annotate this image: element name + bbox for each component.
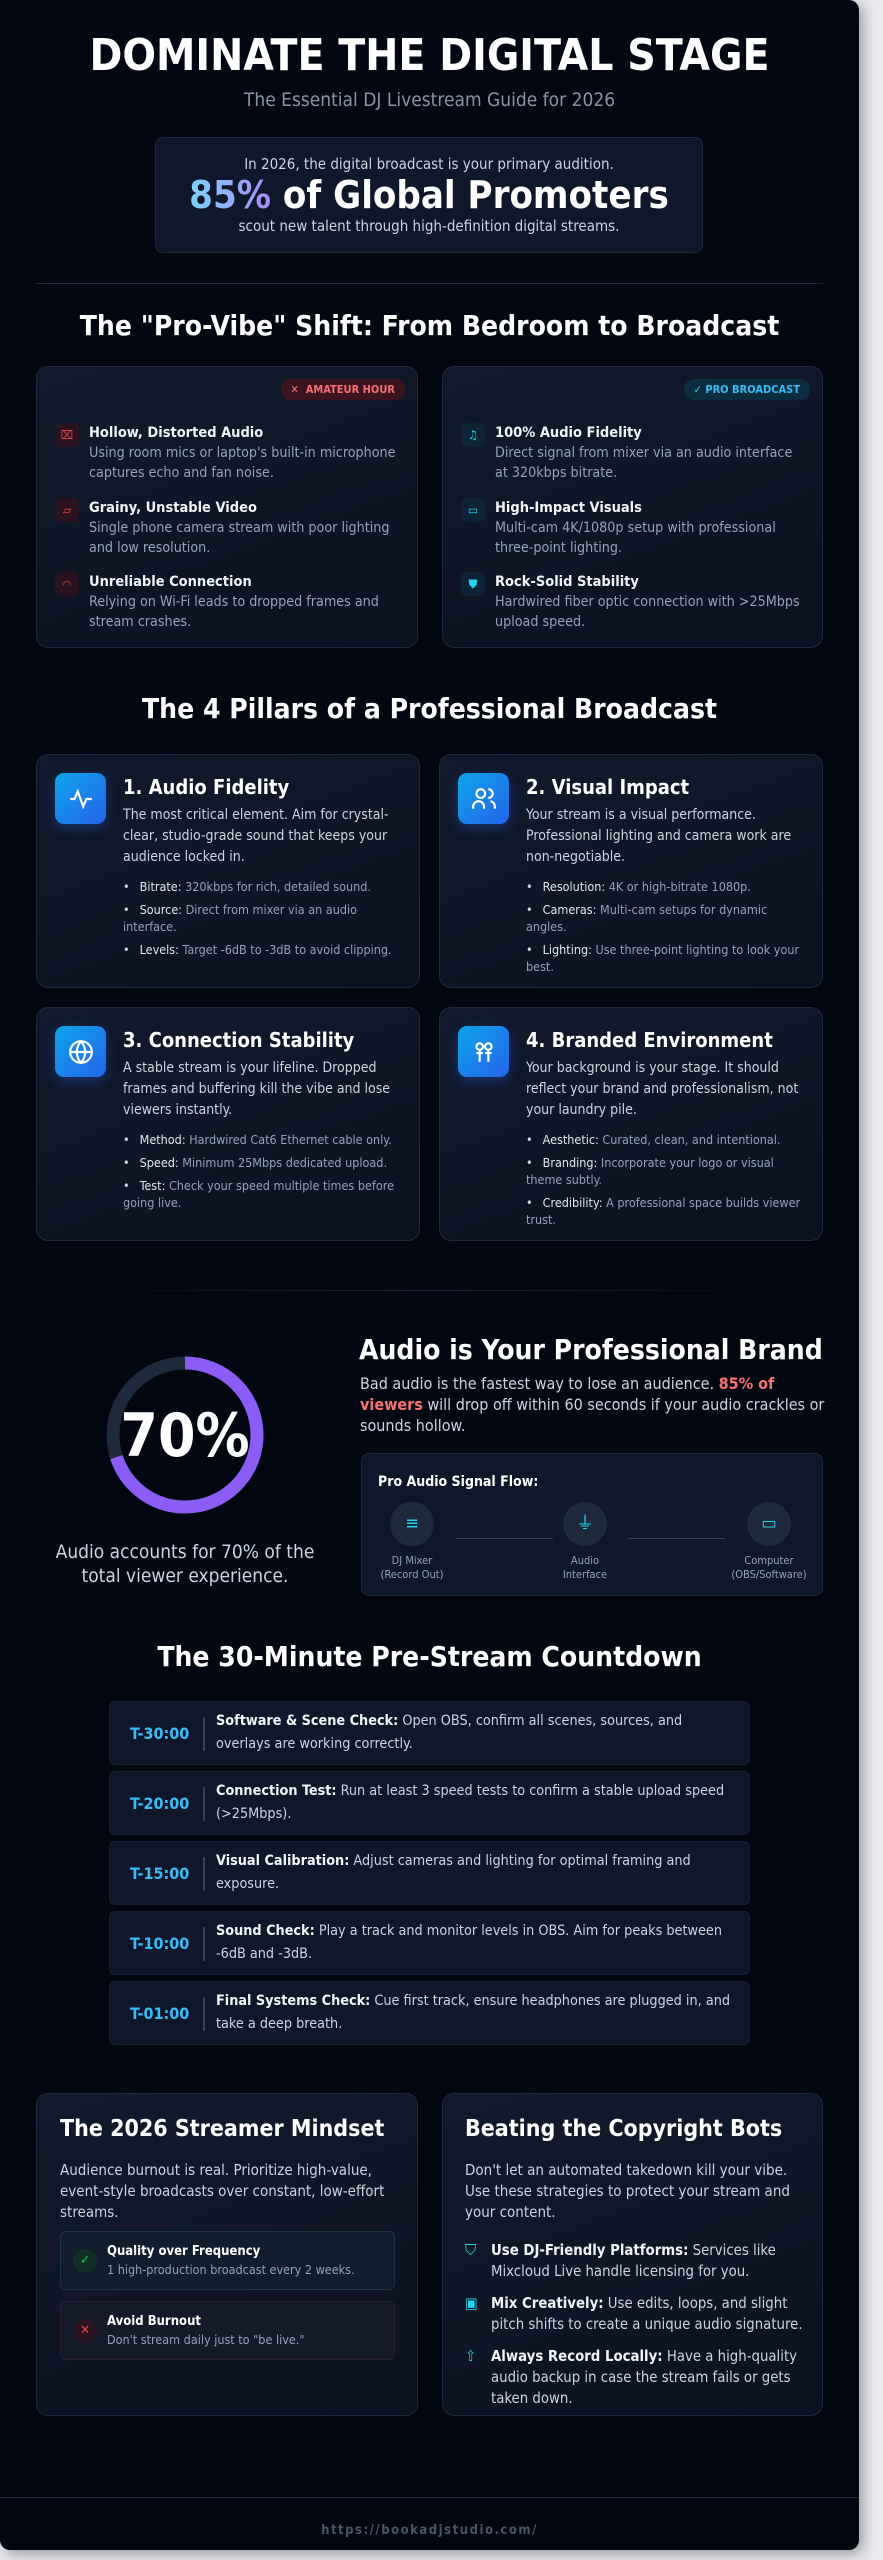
panel: streamer mindset: Audience burnout is real. Prioritize high-value, event-style broadcasts over constant, low-effort streams. [60,2161,384,2221]
panel: copyright bots: Beating the Copyright Bots [465,2116,782,2142]
node: dj mixer: ≡ [405,1513,419,1534]
step T-01: Final Systems Check: Cue first track, ensure headphones are plugged in, and take a deep breath. [216,1993,730,2032]
badge: pro: ✓ PRO BROADCAST [694,383,800,396]
pillar 4: branded environment: Your background is your stage. It should reflect your brand and professionalism, not your laundry pile. [526,1060,798,1118]
panel: copyright bots: ⛉ [465,2242,476,2259]
callout: quality: Quality over Frequency [107,2244,260,2259]
item: fidelity: 100% Audio Fidelity [495,425,642,441]
item: stability [461,572,800,630]
step T-01: T-01:00 [130,2004,189,2023]
step T-15 [109,1841,750,1905]
hero stat box: 85% of Global Promoters [189,173,669,217]
pillar 1: audio fidelity: Levels: Target -6dB to -3dB to avoid clipping. [140,942,392,957]
icon: lights [458,1026,509,1077]
item: stability: Hardwired fiber optic connection with >25Mbps upload speed. [495,594,800,630]
panel: amateur hour: ◠ [63,578,71,590]
pillar 4: branded environment: 4. Branded Environment [526,1028,773,1052]
node: dj mixer [381,1502,443,1581]
item: visuals: Multi-cam 4K/1080p setup with professional three-point lighting. [495,520,776,556]
panel: copyright bots: ▣ [465,2295,478,2312]
node: computer: ▭ [761,1513,777,1534]
panel: streamer mindset [36,2093,418,2416]
pillar 4: branded environment [439,1007,823,1241]
step T-30 [109,1701,750,1765]
pillar 1: audio fidelity: Bitrate: 320kbps for rich, detailed sound. [140,879,371,894]
timeline: countdown steps [109,1701,750,2045]
node: computer [731,1502,807,1581]
donut chart: 70% [106,1356,264,1514]
pillar 2: visual impact [439,754,823,988]
pillar 3: connection: Speed: Minimum 25Mbps dedicated upload. [140,1155,387,1170]
panel: pro broadcast: ▭ [468,503,478,517]
pillar 2: visual impact: Cameras: Multi-cam setups for dynamic angles. [526,902,767,934]
panel: copyright bots: Don't let an automated takedown kill your vibe. Use these strategies to protect your stream and your content. [465,2161,790,2221]
heading: pro-vibe shift: The "Pro-Vibe" Shift: From Bedroom to Broadcast [80,309,779,342]
callout: quality [60,2231,395,2290]
pillar 3: connection [36,1007,420,1241]
subtitle: The Essential DJ Livestream Guide for 2026 [244,89,615,111]
pillar 3: connection: Method: Hardwired Cat6 Ethernet cable only. [140,1132,392,1147]
item: hollow audio: Hollow, Distorted Audio [89,425,263,441]
item: visuals [461,498,776,556]
node: audio interface: Interface [563,1568,607,1581]
pillar 4: branded environment: Branding: Incorporate your logo or visual theme subtly. [526,1155,774,1187]
callout: burnout: Avoid Burnout [107,2314,201,2329]
hero stat box: scout new talent through high-definition digital streams. [239,217,619,235]
icon: pulse [55,773,106,824]
item: grainy video [55,498,390,556]
heading: 4 pillars: The 4 Pillars of a Professional Broadcast [142,692,717,725]
pillar 1: audio fidelity [36,754,420,988]
panel: copyright bots: ⇧ [465,2348,476,2365]
panel: streamer mindset: The 2026 Streamer Mindset [60,2116,384,2142]
step T-10: Sound Check: Play a track and monitor levels in OBS. Aim for peaks between -6dB and -3dB. [216,1923,722,1962]
heading: countdown: The 30-Minute Pre-Stream Countdown [157,1640,702,1673]
node: audio interface: Audio [571,1554,599,1567]
pillar 3: connection: Test: Check your speed multiple times before going live. [123,1178,394,1210]
step T-20: T-20:00 [130,1794,189,1813]
callout: quality: 1 high-production broadcast every 2 weeks. [107,2262,355,2277]
item: hollow audio [55,423,396,481]
step T-20: Connection Test: Run at least 3 speed tests to confirm a stable upload speed (>25Mbps). [216,1783,724,1822]
tip: mix creatively: Mix Creatively: Use edits, loops, and slight pitch shifts to create a unique audio signature. [491,2295,803,2333]
heading: audio brand: Audio is Your Professional Brand [359,1333,823,1366]
pillar 1: audio fidelity: Source: Direct from mixer via an audio interface. [123,902,357,934]
step T-30: Software & Scene Check: Open OBS, confirm all scenes, sources, and overlays are working correctly. [216,1713,682,1752]
item: grainy video: Grainy, Unstable Video [89,500,257,516]
node: computer: Computer [744,1554,794,1567]
step T-30: T-30:00 [130,1724,189,1743]
step T-20 [109,1771,750,1835]
panel: pro broadcast: ⛊ [468,576,478,590]
pillar 1: audio fidelity: The most critical element. Aim for crystal-clear, studio-grade sound that keeps your audience locked in. [123,807,389,865]
item: visuals: High-Impact Visuals [495,500,642,516]
item: unreliable connection: Relying on Wi-Fi leads to dropped frames and stream crashes. [89,594,379,630]
pillar 3: connection: A stable stream is your lifeline. Dropped frames and buffering kill the vibe and lose viewers instantly. [123,1060,390,1118]
item: fidelity [461,423,792,481]
pillar 4: branded environment: Aesthetic: Curated, clean, and intentional. [543,1132,780,1147]
footer url: https://bookadjstudio.com/ [321,2523,538,2538]
badge: pro [684,379,810,400]
hero stat box: In 2026, the digital broadcast is your primary audition. [244,155,614,173]
step T-15: Visual Calibration: Adjust cameras and lighting for optimal framing and exposure. [216,1853,691,1892]
badge: amateur: ✕ AMATEUR HOUR [291,383,395,396]
callout: burnout: Don't stream daily just to "be live." [107,2332,305,2347]
pillar 1: audio fidelity: 1. Audio Fidelity [123,775,289,799]
step T-10: T-10:00 [130,1934,189,1953]
item: unreliable connection: Unreliable Connection [89,574,252,590]
node: dj mixer: (Record Out) [381,1568,443,1581]
pillar 2: visual impact: 2. Visual Impact [526,775,689,799]
icon: people [458,773,509,824]
signal flow box [361,1453,823,1596]
hero stat box [155,137,703,253]
title: DOMINATE THE DIGITAL STAGE [89,30,770,81]
panel: amateur hour: ⌧ [61,428,73,442]
text: audio paragraph: Bad audio is the fastest way to lose an audience. 85% of viewers will drop off within 60 seconds if your audio crackles or sounds hollow. [360,1374,824,1435]
item: stability: Rock-Solid Stability [495,574,639,590]
step T-10 [109,1911,750,1975]
donut chart: 70%: 70% [120,1401,250,1471]
node: dj mixer: DJ Mixer [392,1554,432,1567]
tip: platforms: Use DJ-Friendly Platforms: Services like Mixcloud Live handle licensing for you. [491,2242,776,2280]
panel: pro broadcast: ♫ [468,428,478,442]
badge: amateur [281,379,405,400]
signal flow box: Pro Audio Signal Flow: [378,1474,538,1490]
icon: globe [55,1026,106,1077]
panel: amateur hour: ▱ [63,503,71,517]
donut caption: Audio accounts for 70% of the total viewer experience. [56,1541,314,1587]
item: hollow audio: Using room mics or laptop's built-in microphone captures echo and fan noise. [89,445,396,481]
pillar 2: visual impact: Your stream is a visual performance. Professional lighting and camera work are non-negotiable. [526,807,791,865]
node: audio interface: ⏚ [576,1513,594,1534]
item: grainy video: Single phone camera stream with poor lighting and low resolution. [89,520,390,556]
pillar 3: connection: 3. Connection Stability [123,1028,354,1052]
panel: copyright bots [442,2093,823,2416]
step T-15: T-15:00 [130,1864,189,1883]
callout: burnout: ✕ [80,2323,90,2338]
node: audio interface [563,1502,607,1581]
callout: burnout [60,2301,395,2360]
callout: quality: ✓ [80,2253,90,2268]
item: fidelity: Direct signal from mixer via an audio interface at 320kbps bitrate. [495,445,792,481]
pillar 2: visual impact: Resolution: 4K or high-bitrate 1080p. [543,879,751,894]
panel: pro broadcast [442,366,823,648]
node: computer: (OBS/Software) [731,1568,807,1581]
item: unreliable connection [55,572,379,630]
step T-01 [109,1981,750,2045]
pillar 4: branded environment: Credibility: A professional space builds viewer trust. [526,1195,800,1227]
pillar 2: visual impact: Lighting: Use three-point lighting to look your best. [526,942,799,974]
panel: amateur hour [36,366,418,648]
tip: record locally: Always Record Locally: Have a high-quality audio backup in case the stream fails or gets taken down. [491,2348,797,2407]
